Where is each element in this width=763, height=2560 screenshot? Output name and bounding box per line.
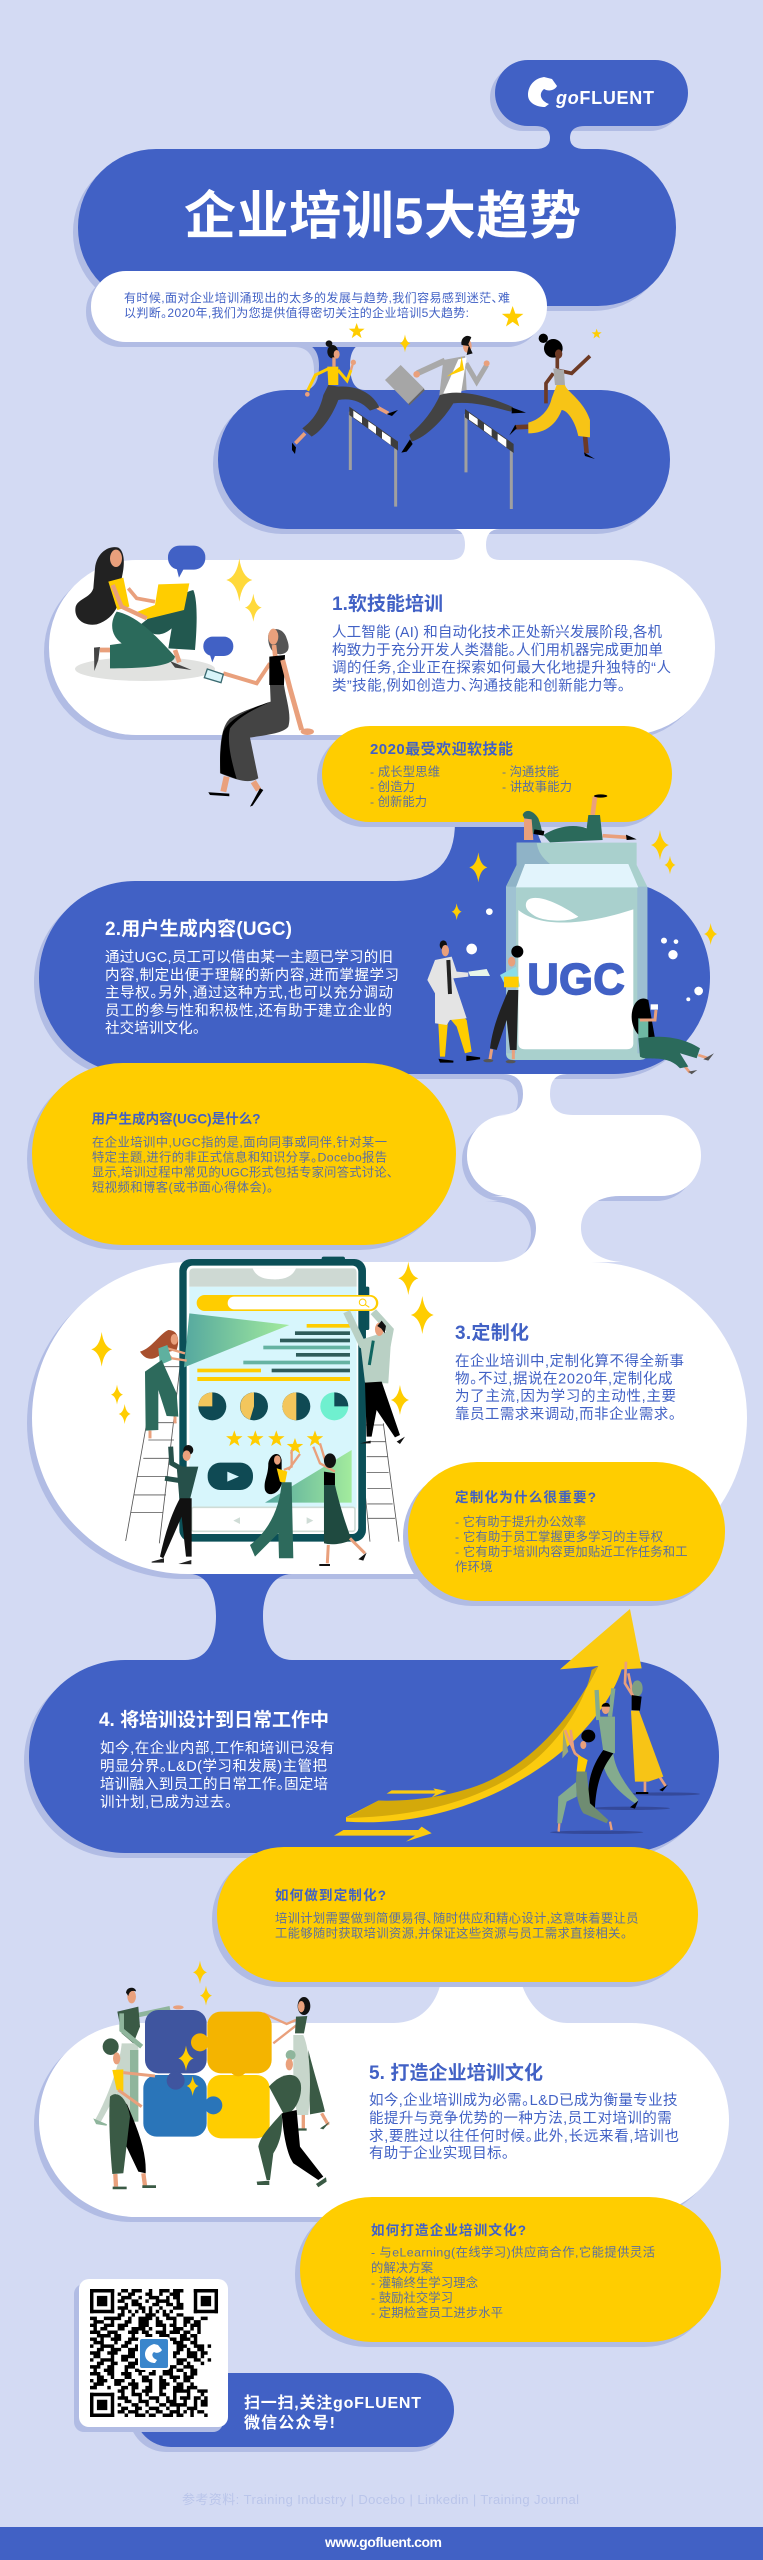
man on right ladder xyxy=(347,1312,405,1444)
QR code xyxy=(90,2289,218,2417)
nav bar xyxy=(192,1507,355,1531)
sparkles xyxy=(452,830,717,945)
body text: 内容,制定出便于理解的新内容,进而掌握学习 xyxy=(105,967,399,984)
body text: 培训融入到员工的日常工作。固定培 xyxy=(100,1776,328,1793)
woman with book xyxy=(483,946,523,1063)
carton xyxy=(506,843,647,1060)
doctor with folder xyxy=(427,940,490,1062)
video button xyxy=(208,1463,253,1490)
panel: section 3 callout xyxy=(403,1462,725,1606)
body text: 通过UGC,员工可以借由某一主题已学习的旧 xyxy=(105,949,393,966)
panel: title xyxy=(73,149,676,311)
man bottom right xyxy=(257,2050,327,2187)
lower triangle xyxy=(265,1450,352,1503)
body text: 有助于企业实现目标。 xyxy=(369,2144,509,2162)
text lines xyxy=(197,1324,350,1381)
body text: 工能够随时获取培训资源,并保证这些资源与员工需求直接相关。 xyxy=(275,1926,627,1940)
pie charts xyxy=(198,1392,348,1420)
small arrows xyxy=(334,1788,447,1842)
heading: 2020最受欢迎软技能 xyxy=(370,740,513,758)
sparkles xyxy=(91,1262,434,1424)
heading: 用户生成内容(UGC)是什么? xyxy=(92,1110,260,1126)
list: - 成长型思维 xyxy=(370,765,440,779)
panel: section 5 culture xyxy=(34,2023,729,2222)
heading: 2.用户生成内容(UGC) xyxy=(105,917,292,940)
list: - 它有助于员工掌握更多学习的主导权 xyxy=(455,1529,663,1544)
connector shape: section 3 to 4 xyxy=(185,1574,292,1660)
icon: stars xyxy=(349,306,602,352)
list: - 沟通技能 xyxy=(502,765,559,779)
woman with laptop xyxy=(75,547,197,671)
call to action text: 扫一扫,关注goFLUENT xyxy=(244,2393,421,2412)
QR logo xyxy=(138,2337,170,2370)
woman right xyxy=(625,1662,668,1794)
body text: 短视频和博客(或书面心得体会)。 xyxy=(92,1180,273,1194)
QR code card xyxy=(74,2279,228,2432)
heading: 如何做到定制化? xyxy=(275,1887,386,1903)
woman reaching for star xyxy=(250,1450,300,1558)
heading: 定制化为什么很重要? xyxy=(455,1489,596,1505)
body text: 类”技能,例如创造力、沟通技能和创新能力等。 xyxy=(332,676,625,694)
list: - 与eLearning(在线学习)供应商合作,它能提供灵活 xyxy=(371,2244,655,2260)
connector shape: hurdles to section 1 xyxy=(450,529,500,560)
body text: 显示,培训过程中常见的UGC形式包括专家问答式讨论、 xyxy=(92,1164,393,1180)
panel: follow us xyxy=(129,2373,454,2452)
speech bubble small xyxy=(203,637,233,662)
call to action text: 微信公众号! xyxy=(244,2414,335,2432)
woman bottom left xyxy=(103,2038,156,2189)
man below ladder xyxy=(152,1445,198,1564)
chart triangle xyxy=(184,1313,289,1367)
ground shadows xyxy=(550,1792,700,1834)
body text: 为了主流,因为学习的主动性,主要 xyxy=(455,1388,676,1405)
man center xyxy=(588,1688,638,1809)
body text: 能提升与竞争优势的一种方法,员工对培训的需 xyxy=(369,2109,672,2127)
panel: decorative white blob xyxy=(462,1115,701,1267)
illustration: phone and people xyxy=(91,1257,434,1566)
woman on left ladder xyxy=(140,1330,187,1438)
body text: 社交培训文化。 xyxy=(105,1019,200,1037)
puzzle pieces xyxy=(143,2010,272,2138)
heading: 如何打造企业培训文化? xyxy=(371,2222,526,2238)
woman lying on carton xyxy=(523,794,637,842)
woman in dark skirt xyxy=(313,1443,367,1566)
body text: 员工的参与性和积极性,还有助于建立企业的 xyxy=(105,1002,392,1020)
phone xyxy=(179,1257,378,1542)
body text: 在企业培训中,定制化算不得全新事 xyxy=(455,1352,684,1370)
seated woman with phone xyxy=(204,629,314,807)
illustration: two women with laptop and phone xyxy=(75,546,314,807)
panel: hurdles backdrop xyxy=(213,390,670,534)
woman right top xyxy=(263,1997,330,2131)
connector shape: section 2 to blob xyxy=(495,1074,573,1120)
heading: 5. 打造企业培训文化 xyxy=(369,2061,543,2084)
footer bar xyxy=(0,2527,763,2560)
panel: UGC callout xyxy=(27,1063,456,1250)
search bar xyxy=(197,1295,378,1311)
heading: 4. 将培训设计到日常工作中 xyxy=(99,1708,329,1731)
heading: 1.软技能培训 xyxy=(332,592,443,615)
woman left xyxy=(557,1730,612,1832)
ladders xyxy=(126,1367,399,1543)
runner: woman left xyxy=(292,340,398,454)
sparkles xyxy=(178,1961,212,2096)
man top left xyxy=(95,1988,184,2125)
body text: 物。不过,据说在2020年,定制化成 xyxy=(455,1370,672,1388)
body text: 调的任务,企业正在探索如何最大化地提升独特的“人 xyxy=(332,658,671,676)
hurdle two xyxy=(465,409,514,509)
body text: 主导权。另外,通过这种方式,也可以充分调动 xyxy=(105,984,393,1002)
connector shape: callout to section 5 xyxy=(394,1982,567,2023)
body text: 如今,在企业内部,工作和培训已没有 xyxy=(100,1739,334,1757)
panel: section 3 customization xyxy=(27,1262,747,1579)
woman with cup xyxy=(632,999,714,1074)
speech bubble large xyxy=(168,546,205,578)
rating stars xyxy=(226,1430,323,1454)
body text: 特定主题,进行的非正式信息和知识分享。Docebo报告 xyxy=(92,1150,387,1164)
big arrow xyxy=(346,1609,642,1822)
list: - 讲故事能力 xyxy=(502,779,572,794)
list: - 定期检查员工进步水平 xyxy=(371,2305,503,2320)
hurdle one xyxy=(349,407,398,507)
body text: 如今,企业培训成为必需。L&D已成为衡量专业技 xyxy=(369,2091,678,2109)
body text: 构致力于充分开发人类潜能。人们用机器完成更加单 xyxy=(332,642,663,659)
runner: man with briefcase xyxy=(385,336,526,453)
intro text: 有时候,面对企业培训涌现出的太多的发展与趋势,我们容易感到迷茫、难 xyxy=(124,290,510,305)
illustration: puzzle team xyxy=(95,1961,330,2189)
website: www.gofluent.com xyxy=(324,2534,442,2550)
connector shape: intro to hurdles xyxy=(294,342,370,395)
runner: woman right xyxy=(509,334,595,459)
list: - 创造力 xyxy=(370,780,415,794)
label UGC: UGC xyxy=(527,956,625,1004)
body text: 培训计划需要做到简便易得、随时供应和精心设计,这意味着要让员 xyxy=(275,1910,638,1926)
body text: 训计划,已成为过去。 xyxy=(100,1794,232,1811)
body text: 人工智能 (AI) 和自动化技术正处新兴发展阶段,各机 xyxy=(332,624,662,641)
logo wordmark: goFLUENT xyxy=(555,88,654,108)
list: 作环境 xyxy=(455,1559,492,1574)
panel: section 1 callout popular skills xyxy=(317,726,672,827)
illustration: UGC milk carton and people xyxy=(427,794,717,1074)
panel: section 4 callout xyxy=(212,1847,698,1987)
list: 的解决方案 xyxy=(371,2260,433,2275)
list: - 鼓励社交学习 xyxy=(371,2290,453,2305)
panel: section 2 UGC xyxy=(34,881,710,1079)
intro text: 以判断。2020年,我们为您提供值得密切关注的企业培训5大趋势: xyxy=(124,305,469,320)
list: - 灌输终生学习理念 xyxy=(371,2275,478,2290)
heading: 3.定制化 xyxy=(455,1321,529,1344)
sparkles xyxy=(226,558,262,622)
body text: 靠员工需求来调动,而非企业需求。 xyxy=(455,1405,676,1423)
illustration: people jumping hurdles xyxy=(292,306,602,509)
body text: 明显分界。L&D(学习和发展)主管把 xyxy=(100,1758,328,1775)
connector shape: section 2 top xyxy=(396,822,620,881)
panel: section 1 soft skills xyxy=(44,560,715,740)
list: - 创新能力 xyxy=(370,794,427,809)
panel: section 4 daily work xyxy=(24,1660,719,1858)
body text: 求,要胜过以往任何时候。此外,长远来看,培训也 xyxy=(369,2128,679,2145)
icon: goFLUENT head xyxy=(528,77,557,107)
panel: intro text xyxy=(86,271,547,347)
title: 企业培训5大趋势 xyxy=(184,188,581,246)
ground shadow xyxy=(75,657,215,681)
panel: section 5 callout xyxy=(295,2197,721,2347)
list: - 它有助于培训内容更加贴近工作任务和工 xyxy=(455,1544,688,1559)
body text: 在企业培训中,UGC指的是,面向同事或同伴,针对某一 xyxy=(92,1134,387,1150)
illustration: growth arrow and people xyxy=(334,1609,700,1842)
references: 参考资料: Training Industry | Docebo | Linkedin | Training Journal xyxy=(182,2492,579,2507)
bubbles xyxy=(466,908,703,1001)
panel: logo badge xyxy=(490,60,688,149)
list: - 它有助于提升办公效率 xyxy=(455,1514,586,1529)
